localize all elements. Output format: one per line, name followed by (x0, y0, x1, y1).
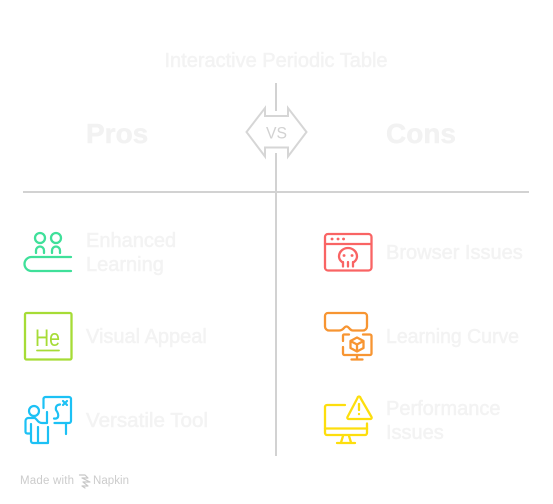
text: browser issues: Browser Issues (386, 242, 523, 264)
icon: browser skull (325, 234, 372, 270)
vs badge: VS (266, 124, 287, 142)
heading: pros: Pros (86, 118, 148, 149)
text: visual appeal: Visual Appeal (86, 326, 207, 348)
panel: pros (24, 230, 208, 443)
horizontal divider (23, 191, 529, 193)
icon: headset and cube (325, 313, 372, 360)
text: learning curve: Learning Curve (386, 326, 519, 348)
icon: napkin logo (80, 475, 90, 488)
icon: monitor warning (325, 396, 372, 443)
panel: cons (325, 234, 523, 444)
heading: cons: Cons (386, 118, 456, 149)
text: enhanced learning: Learning (86, 254, 164, 276)
vertical divider (275, 83, 277, 456)
title: Interactive Periodic Table (164, 50, 388, 72)
text: performance issues: Performance (386, 398, 500, 420)
text: enhanced learning: Enhanced (86, 230, 176, 252)
vs badge (246, 108, 306, 156)
icon: enhanced learning (24, 233, 71, 271)
icon: helium tile: He (35, 325, 60, 352)
footer: made with napkin (20, 475, 129, 488)
text: versatile tool: Versatile Tool (86, 410, 208, 432)
icon: teacher at board (25, 397, 71, 443)
icon: helium tile (25, 313, 72, 360)
footer: made with napkin: Napkin (93, 475, 129, 487)
text: performance issues: Issues (386, 422, 444, 444)
footer: made with napkin: Made with (20, 475, 74, 487)
